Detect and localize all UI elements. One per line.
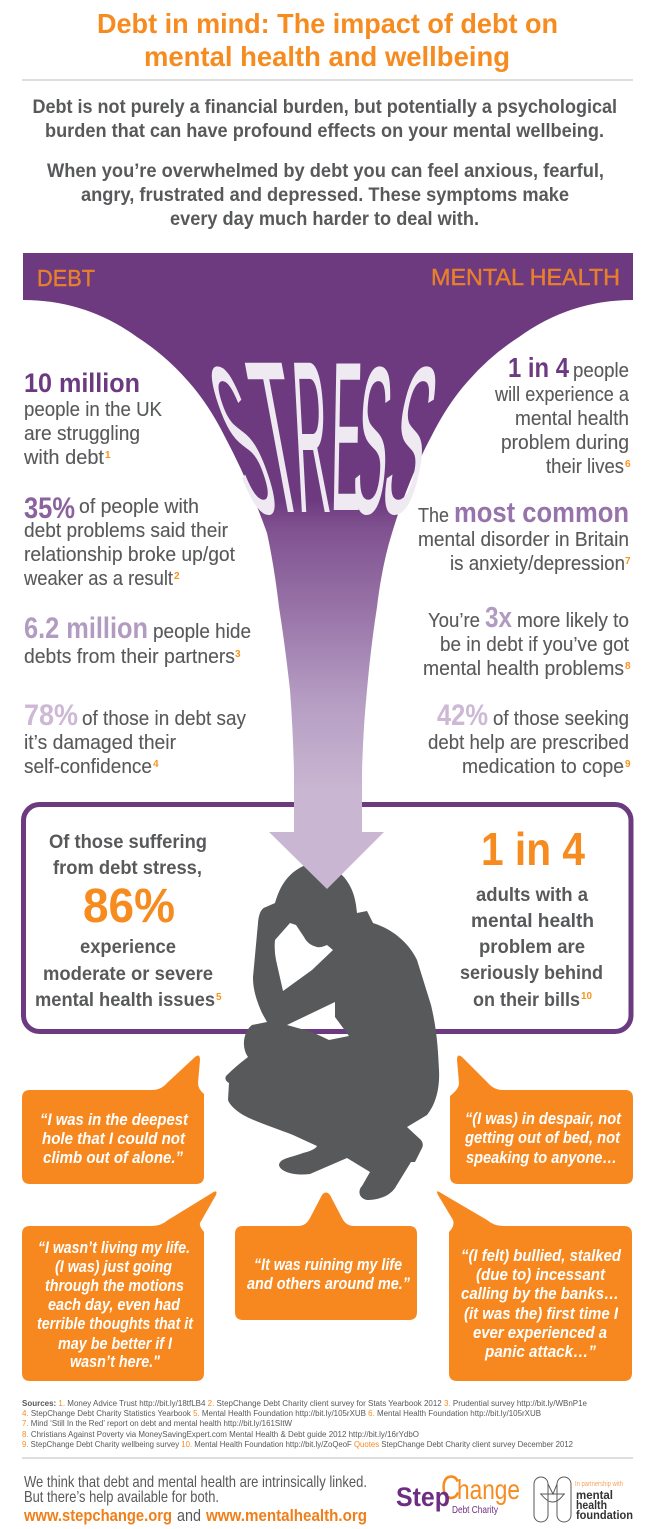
stat: 1 in 4 people: problem during (501, 431, 629, 454)
text: adults behind on bills statistic: on their bills (473, 989, 580, 1011)
callout: in despair (450, 1056, 633, 1184)
stat: 10 million (23, 368, 162, 469)
text: adults behind on bills statistic: 10 (581, 991, 592, 1002)
stat: 1 in 4 people (494, 352, 631, 478)
stat: most common: mental disorder in Britain (418, 528, 629, 551)
stat: 10 million: 10 million (24, 368, 140, 398)
callout: in despair: speaking to anyone… (466, 1149, 617, 1167)
stat: 35%: 35% (24, 492, 75, 525)
footer message: www.mentalhealth.org (205, 1506, 367, 1525)
callout: bullied and stalked: calling by the banks… (461, 1285, 619, 1303)
stat: 78%: of those in debt say (82, 707, 247, 730)
stat: 3x (423, 602, 631, 680)
callout: bullied and stalked: (due to) incessant (476, 1266, 606, 1284)
stat: 35% (23, 492, 235, 590)
text: debt stress statistic: moderate or severe (43, 963, 213, 985)
stat: 6.2 million: 6.2 million (24, 612, 148, 645)
stress lettering: T (235, 317, 319, 559)
callout: deepest hole: hole that I could not (42, 1130, 186, 1148)
text: adults behind on bills statistic (460, 823, 603, 1011)
intro text (32, 97, 617, 230)
left column statistics (23, 368, 251, 778)
stat: 42%: medication to cope (462, 755, 624, 778)
callout: bullied and stalked: panic attack…” (484, 1343, 597, 1361)
funnel and arrow (23, 253, 633, 889)
stress lettering: S (346, 324, 400, 558)
stat: most common: 7 (625, 556, 631, 567)
logo: mental health foundation: mental (576, 1490, 613, 1502)
heading: mental health: MENTAL HEALTH (431, 264, 620, 290)
text: adults behind on bills statistic: mental health (471, 910, 594, 932)
footer message: www.stepchange.org (23, 1506, 172, 1525)
sources: 9. StepChange Debt Charity wellbeing survey 10. Mental Health Foundation http://bit.ly/ZoQeoF Quotes StepChange Debt Charity client survey December 2012 (22, 1440, 574, 1449)
stat: 35%: 2 (174, 571, 180, 582)
stat: 3x: 3x (485, 602, 512, 634)
footer message: and (177, 1506, 201, 1525)
text: debt stress statistic: mental health issues (35, 989, 215, 1011)
footer message (23, 1474, 367, 1525)
title: mental health and wellbeing (144, 41, 510, 72)
text: adults behind on bills statistic: problem are (479, 936, 585, 958)
callout: bullied and stalked: ever experienced a (473, 1324, 607, 1342)
footer message: We think that debt and mental health are intrinsically linked. (24, 1474, 367, 1491)
stat: 6.2 million: 3 (235, 649, 241, 660)
text: debt stress statistic: from debt stress, (53, 857, 202, 879)
callout: in despair: “(I was) in despair, not (465, 1110, 622, 1128)
sources (22, 1399, 588, 1449)
stat: 3x: more likely to (517, 609, 629, 632)
logo: mental health foundation: In partnership with (575, 1481, 623, 1488)
logo: StepChange Debt Charity: C (441, 1469, 460, 1507)
sources: Sources: 1. Money Advice Trust http://bit.ly/18tfLB4 2. StepChange Debt Charity client survey for Stats Yearbook 2012 3. Prudential survey http://bit.ly/WBnP1e (22, 1399, 588, 1408)
stress lettering: S (187, 325, 299, 559)
callout: not living my life: (I was) just going (55, 1258, 172, 1276)
stat: 6.2 million (24, 612, 251, 668)
stat: 1 in 4 people: will experience a (494, 383, 630, 406)
intro text: angry, frustrated and depressed. These symptoms make (81, 185, 569, 206)
stat: 1 in 4 people: people (573, 359, 629, 382)
stat: 3x: You’re (428, 609, 480, 632)
stat: 1 in 4 people: 1 in 4 (508, 352, 569, 383)
stat: 10 million: are struggling (24, 422, 140, 445)
stat: 42%: 42% (437, 699, 488, 732)
stat: 6.2 million: debts from their partners (24, 645, 235, 668)
callout: not living my life: each day, even had (48, 1296, 181, 1314)
stat: 42%: debt help are prescribed (428, 731, 629, 754)
stat: 35%: debt problems said their (24, 519, 228, 542)
stat: 78%: 78% (24, 699, 78, 732)
callout: deepest hole: “I was in the deepest (40, 1111, 189, 1129)
text: adults behind on bills statistic: 1 in 4 (481, 823, 585, 875)
callout: ruining my life: and others around me.” (247, 1275, 411, 1293)
intro text: every day much harder to deal with. (170, 209, 479, 230)
callout: deepest hole: climb out of alone.” (43, 1149, 184, 1167)
stress lettering: S (367, 324, 453, 559)
stat: 1 in 4 people: mental health (515, 407, 629, 430)
stat: 1 in 4 people: their lives (546, 455, 624, 478)
stat: 42%: of those seeking (493, 707, 629, 730)
sources: 8. Christians Against Poverty via MoneySavingExpert.com Mental Health & Debt guide 2012 http://bit.ly/16rYdbO (22, 1430, 419, 1439)
text: debt stress statistic: Of those suffering (49, 831, 207, 853)
stat: 6.2 million: people hide (153, 620, 251, 643)
stat: 78%: it’s damaged their (24, 731, 176, 754)
callout: not living my life (22, 1191, 216, 1381)
stat: 35%: of people with (79, 495, 199, 518)
stat: most common: is anxiety/depression (450, 552, 625, 575)
text: debt stress statistic (35, 831, 222, 1011)
text: adults behind on bills statistic: adults with a (476, 884, 588, 906)
callout: not living my life: terrible thoughts that it (37, 1315, 194, 1333)
stat: 35%: relationship broke up/got (24, 543, 235, 566)
title (97, 8, 558, 72)
stat: most common: The (418, 504, 449, 527)
stat: 35%: weaker as a result (23, 567, 173, 590)
footer message: But there’s help available for both. (24, 1489, 219, 1506)
callout: bullied and stalked: “(I felt) bullied, stalked (461, 1247, 622, 1265)
stat: 42% (428, 699, 631, 778)
stress lettering: E (329, 316, 364, 556)
logo: mental health foundation (534, 1477, 633, 1522)
sources: 7. Mind ‘Still In the Red’ report on debt and mental health http://bit.ly/161SItW (22, 1419, 292, 1428)
intro text: When you’re overwhelmed by debt you can feel anxious, fearful, (47, 161, 604, 182)
text: debt stress statistic: experience (80, 936, 176, 958)
stat: 78%: 4 (153, 759, 159, 770)
right column statistics (418, 352, 631, 778)
panel: summary box (24, 804, 631, 1032)
stat: 10 million: people in the UK (24, 398, 162, 421)
stat: 10 million: with debt (23, 446, 104, 469)
stat: most common (418, 497, 631, 575)
callout: in despair: getting out of bed, not (464, 1129, 621, 1147)
stress lettering: R (288, 317, 334, 559)
stat: 78%: self-confidence (24, 755, 152, 778)
logo: StepChange Debt Charity: Step (396, 1482, 450, 1512)
callout: ruining my life (235, 1192, 417, 1320)
callout: bullied and stalked: (it was the) first time I (464, 1305, 618, 1323)
stat: 10 million: 1 (105, 450, 111, 461)
logo: StepChange Debt Charity: Debt Charity (452, 1504, 499, 1516)
stress lettering (187, 316, 453, 559)
callout: not living my life: “I wasn’t living my life. (38, 1239, 190, 1257)
text: debt stress statistic: 5 (216, 992, 222, 1003)
stat: 3x: 8 (625, 661, 631, 672)
stat: most common: most common (454, 497, 629, 529)
callout: not living my life: through the motions (45, 1277, 184, 1295)
stat: 78% (24, 699, 247, 778)
icon: head-in-hand silhouette (225, 862, 439, 1200)
callout: bullied and stalked (437, 1191, 632, 1381)
sources: 4. StepChange Debt Charity Statistics Yearbook 5. Mental Health Foundation http://bit.ly/105rXUB 6. Mental Health Foundation http://bit.ly/105rXUB (22, 1409, 541, 1418)
logo: mental health foundation: foundation (576, 1510, 633, 1522)
intro text: burden that can have profound effects on your mental wellbeing. (45, 121, 604, 142)
text: adults behind on bills statistic: seriously behind (460, 962, 603, 984)
callout: not living my life: may be better if I (58, 1335, 172, 1353)
callout: deepest hole (22, 1056, 204, 1184)
callout: not living my life: wasn’t here." (70, 1353, 160, 1371)
logo: StepChange Debt Charity (396, 1469, 520, 1516)
text: debt stress statistic: 86% (83, 880, 175, 933)
callout: ruining my life: “It was ruining my life (254, 1256, 402, 1274)
stat: 42%: 9 (625, 759, 631, 770)
stat: 3x: mental health problems (423, 657, 624, 680)
intro text: Debt is not purely a financial burden, but potentially a psychological (32, 97, 617, 118)
heading: debt: DEBT (37, 265, 95, 291)
title: Debt in mind: The impact of debt on (97, 8, 558, 39)
stat: 3x: be in debt if you’ve got (440, 633, 629, 656)
logo: mental health foundation: health (576, 1500, 607, 1512)
logo: StepChange Debt Charity: hange (457, 1474, 520, 1505)
stat: 1 in 4 people: 6 (625, 459, 631, 470)
